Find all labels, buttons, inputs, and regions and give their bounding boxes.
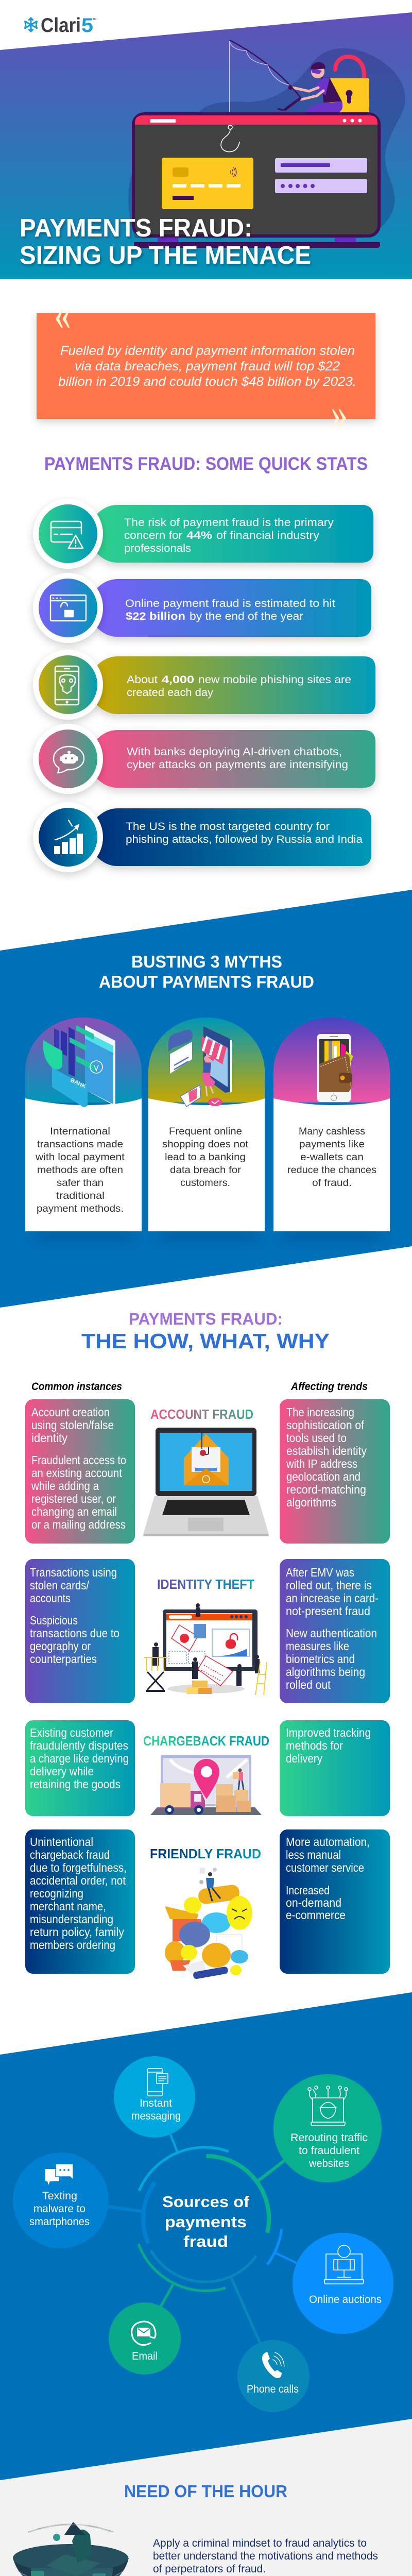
box: instances: Fraudulent access to xyxy=(31,1453,126,1467)
myth text: of fraud. xyxy=(312,1177,352,1189)
text xyxy=(127,746,348,771)
box: trends: methods for xyxy=(286,1739,343,1752)
source: texting malware xyxy=(13,2153,109,2248)
box: trends: with IP address xyxy=(286,1457,357,1470)
box: instances: changing an email xyxy=(31,1505,117,1518)
myth text xyxy=(35,1126,125,1214)
icon: card warning xyxy=(51,521,83,548)
myth text: reduce the chances xyxy=(287,1164,376,1176)
icon: hacker laptop network xyxy=(308,2086,348,2126)
text: The risk of payment fraud is the primary xyxy=(124,517,334,529)
myth text: Many cashless xyxy=(299,1126,365,1137)
box: trends: biometrics and xyxy=(286,1652,355,1666)
box: trends: rolled out, there is xyxy=(286,1579,372,1592)
box: instances: return policy, family xyxy=(30,1925,124,1939)
box: instances: while adding a xyxy=(31,1479,99,1493)
laptop xyxy=(133,114,380,248)
myth text: lead to a banking xyxy=(165,1151,246,1163)
text: by the end of the year xyxy=(190,611,303,622)
text: professionals xyxy=(124,543,191,554)
icon: phone message xyxy=(147,2069,168,2096)
centre label xyxy=(162,2193,250,2250)
box: trends: Increased xyxy=(286,1884,330,1897)
title: PAYMENTS FRAUD: xyxy=(20,214,252,242)
heading xyxy=(99,952,314,991)
row: identity theft xyxy=(25,1559,390,1703)
box: trends xyxy=(280,1720,390,1816)
quote text: via data breaches, payment fraud will top $22 xyxy=(75,359,340,374)
box: instances: due to forgetfulness, xyxy=(30,1861,127,1874)
heading: how what why xyxy=(81,1310,330,1353)
box: instances xyxy=(25,1399,135,1544)
source: texting malware: malware to xyxy=(33,2203,85,2215)
box: trends: measures like xyxy=(286,1639,349,1653)
illustration: hackers on a monitor xyxy=(144,1603,267,1695)
text xyxy=(127,674,351,699)
illustration: shield, phone and bank card: BANK xyxy=(70,1077,87,1090)
label: friendly fraud: FRIENDLY FRAUD xyxy=(150,1846,261,1861)
icon: phone xyxy=(262,2352,284,2378)
box: trends: The increasing xyxy=(286,1405,354,1419)
text: cyber attacks on payments are intensifying xyxy=(127,759,348,771)
text xyxy=(125,598,335,622)
title xyxy=(20,214,311,269)
myth card 1 xyxy=(25,1018,142,1231)
centre label: fraud xyxy=(183,2232,228,2250)
source: phone calls: Phone calls xyxy=(247,2383,299,2395)
illustration: laptop phishing envelope xyxy=(143,1428,269,1536)
box: trends: algorithms being xyxy=(286,1665,365,1679)
title: SIZING UP THE MENACE xyxy=(20,242,311,269)
text 1 xyxy=(153,2537,378,2575)
box: trends: delivery xyxy=(286,1752,322,1765)
box: trends: geolocation and xyxy=(286,1470,360,1483)
box: instances: Unintentional xyxy=(30,1835,93,1849)
myth text: payment methods. xyxy=(37,1203,124,1214)
myth text: customers. xyxy=(180,1177,230,1189)
box: trends: on-demand xyxy=(286,1896,341,1909)
text: Online payment fraud is estimated to hit xyxy=(125,598,335,609)
myth card 2 xyxy=(148,1018,265,1231)
box: instances: stolen cards/ xyxy=(30,1579,90,1592)
panel: stat 4 xyxy=(33,724,375,794)
myth text: shopping does not xyxy=(162,1139,249,1150)
source: phone calls xyxy=(237,2340,310,2412)
text 1: Apply a criminal mindset to fraud analytics to xyxy=(153,2537,367,2549)
fishing rod and line xyxy=(230,40,301,125)
text: With banks deploying AI-driven chatbots, xyxy=(127,746,342,758)
icon: closing quote mark: » xyxy=(331,387,348,439)
myth text xyxy=(162,1126,249,1189)
icon: chatbot bubble xyxy=(54,747,84,773)
label: chargeback fraud: CHARGEBACK FRAUD xyxy=(143,1733,269,1749)
label: account fraud: ACCOUNT FRAUD xyxy=(150,1406,253,1422)
credit card xyxy=(162,158,253,209)
box: trends: not-present fraud xyxy=(286,1604,370,1618)
icon: auction laptop xyxy=(324,2245,364,2284)
panel: need of the hour xyxy=(13,2482,382,2576)
text: About xyxy=(127,674,158,686)
box: trends: customer service xyxy=(286,1861,364,1874)
box: trends xyxy=(280,1559,390,1703)
myth text: International xyxy=(50,1126,110,1137)
box: instances: delivery while xyxy=(30,1765,94,1778)
source: email: Email xyxy=(132,2350,158,2362)
logo: Clari5: Clari xyxy=(41,14,81,37)
box: instances xyxy=(25,1559,135,1703)
heading: how what why: PAYMENTS FRAUD: xyxy=(129,1310,283,1328)
box: instances: registered user, or xyxy=(31,1492,116,1505)
panel: sources of payments fraud xyxy=(0,1992,412,2480)
box: trends: More automation, xyxy=(286,1835,370,1849)
logo: Clari5 xyxy=(25,14,96,37)
text: 4,000 xyxy=(162,674,194,686)
text: $22 billion xyxy=(126,611,185,622)
icon: rising bars xyxy=(54,820,83,854)
need-section background xyxy=(0,2391,412,2576)
box: trends xyxy=(280,1399,390,1544)
source: email xyxy=(109,2302,181,2375)
text: created each day xyxy=(127,687,214,699)
row: friendly fraud xyxy=(25,1829,390,1979)
fish hook xyxy=(221,125,239,152)
heading: quick stats: PAYMENTS FRAUD: SOME QUICK STATS xyxy=(44,454,368,474)
myth text: e-wallets can xyxy=(300,1151,364,1163)
myth text: payments like xyxy=(299,1139,365,1150)
quote text: Fuelled by identity and payment information stolen xyxy=(60,344,355,358)
box: instances: an existing account xyxy=(31,1466,123,1480)
box: trends: less manual xyxy=(286,1848,341,1861)
text xyxy=(126,821,363,845)
source: rerouting traffic: Rerouting traffic xyxy=(290,2132,368,2144)
illustration: shield, phone and bank card xyxy=(43,1025,115,1107)
text: 44% xyxy=(186,530,212,541)
icon: opening quote mark: « xyxy=(54,287,71,340)
box: trends: e-commerce xyxy=(286,1908,346,1922)
panel: busting myths xyxy=(0,890,412,1308)
illustration: angry speech bubbles xyxy=(165,1868,252,1979)
box: trends: tools used to xyxy=(286,1431,347,1445)
heading: BUSTING 3 MYTHS xyxy=(131,952,282,971)
text: The US is the most targeted country for xyxy=(126,821,330,833)
box: instances: geography or xyxy=(30,1639,91,1653)
text: new mobile phishing sites are xyxy=(198,674,351,686)
box: instances: members ordering xyxy=(30,1938,115,1952)
heading: how what why: THE HOW, WHAT, WHY xyxy=(81,1329,330,1353)
text 1: of perpetrators of fraud. xyxy=(153,2563,266,2575)
box: instances: accidental order, not xyxy=(30,1874,126,1887)
illustration: phishing thief on a laptop xyxy=(128,40,405,248)
quote text: billion in 2019 and could touch $48 billion by 2023. xyxy=(58,375,356,389)
column label: common instances: Common instances xyxy=(31,1381,122,1393)
box: instances: Account creation xyxy=(31,1405,110,1419)
centre label: Sources of xyxy=(162,2193,250,2211)
icon: at-mail xyxy=(132,2321,156,2345)
box: instances: Existing customer xyxy=(30,1726,113,1739)
text xyxy=(124,517,334,554)
box: trends: Improved tracking xyxy=(286,1726,371,1739)
box: trends: record-matching xyxy=(286,1483,366,1496)
box: instances: transactions due to xyxy=(30,1626,119,1640)
panel: quote callout xyxy=(37,287,375,439)
heading: NEED OF THE HOUR xyxy=(124,2482,287,2501)
myth text: transactions made xyxy=(37,1139,123,1150)
myth text: safer than xyxy=(57,1177,104,1189)
arcs and connectors xyxy=(108,2134,297,2343)
source: rerouting traffic xyxy=(273,2074,382,2182)
panel: stat 2 xyxy=(33,573,371,643)
source: online auctions xyxy=(293,2233,393,2334)
thief xyxy=(293,62,342,114)
box: instances: using stolen/false xyxy=(31,1418,114,1432)
box: instances: Suspicious xyxy=(30,1614,78,1627)
box: trends: rolled out xyxy=(286,1678,331,1691)
box: instances: chargeback fraud xyxy=(30,1848,110,1861)
text: concern for xyxy=(124,530,182,541)
icon: browser padlock xyxy=(50,595,86,621)
myth text: data breach for xyxy=(170,1164,242,1176)
panel: stat 1 xyxy=(33,499,373,569)
panel: stat 3 xyxy=(33,650,375,720)
box: instances: recognizing xyxy=(30,1887,83,1900)
box: trends: an increase in card- xyxy=(286,1591,379,1605)
source: rerouting traffic: to fraudulent xyxy=(299,2145,359,2157)
text: phishing attacks, followed by Russia and India xyxy=(126,834,363,845)
source: instant messaging: messaging xyxy=(131,2110,181,2122)
box: instances: a charge like denying xyxy=(30,1752,129,1765)
logo: Clari5: TM xyxy=(93,18,96,21)
box: instances: Transactions using xyxy=(30,1566,117,1579)
column label: affecting trends: Affecting trends xyxy=(290,1381,368,1393)
panel: stat 5 xyxy=(33,802,371,872)
myth text: methods are often xyxy=(37,1164,123,1176)
box: trends: New authentication xyxy=(286,1626,377,1640)
logo: Clari5: 5 xyxy=(81,14,93,37)
illustration: hacker disc xyxy=(13,2522,129,2576)
label: identity theft: IDENTITY THEFT xyxy=(157,1577,254,1592)
box: instances: counterparties xyxy=(30,1652,97,1666)
source: online auctions: Online auctions xyxy=(309,2294,382,2306)
illustration: e-wallet phone xyxy=(317,1034,353,1102)
box: trends xyxy=(280,1829,390,1974)
box: trends: algorithms xyxy=(286,1496,336,1509)
source: instant messaging: Instant xyxy=(140,2097,172,2109)
myth card 3 xyxy=(273,1018,390,1231)
myth text: with local payment xyxy=(35,1151,125,1163)
box: trends: establish identity xyxy=(286,1444,367,1458)
icon: chat bubbles xyxy=(45,2164,73,2185)
panel: hero xyxy=(0,12,412,279)
source: rerouting traffic: websites xyxy=(308,2158,349,2170)
icon: phone skull xyxy=(55,666,79,705)
login fields xyxy=(275,158,367,193)
box: instances: or a mailing address xyxy=(31,1518,126,1531)
row: chargeback fraud xyxy=(25,1720,390,1816)
box: instances xyxy=(25,1720,135,1816)
centre label: payments xyxy=(165,2213,247,2231)
text 1: better understand the motivations and methods xyxy=(153,2550,378,2562)
box: instances: merchant name, xyxy=(30,1900,106,1913)
row: account fraud xyxy=(25,1399,390,1544)
padlock xyxy=(330,57,369,113)
source: texting malware: Texting xyxy=(42,2190,77,2202)
text: of financial industry xyxy=(216,530,320,541)
source: texting malware: smartphones xyxy=(29,2216,90,2228)
myth text: traditional xyxy=(56,1190,105,1201)
illustration: mobile shop and shopper xyxy=(168,1026,232,1107)
source: instant messaging xyxy=(114,2056,195,2138)
box: instances: misunderstanding xyxy=(30,1912,113,1926)
box: instances: accounts xyxy=(30,1591,71,1605)
quote text xyxy=(58,344,356,389)
heading: ABOUT PAYMENTS FRAUD xyxy=(99,972,314,991)
box: instances: retaining the goods xyxy=(30,1777,121,1791)
box: instances: fraudulently disputes xyxy=(30,1739,128,1752)
myth text xyxy=(287,1126,376,1189)
box: instances: identity xyxy=(31,1431,67,1445)
box: trends: After EMV was xyxy=(286,1566,354,1579)
box: trends: sophistication of xyxy=(286,1418,365,1432)
illustration: delivery truck and map pin xyxy=(150,1755,262,1815)
myth text: Frequent online xyxy=(169,1126,242,1137)
box: instances xyxy=(25,1829,135,1974)
